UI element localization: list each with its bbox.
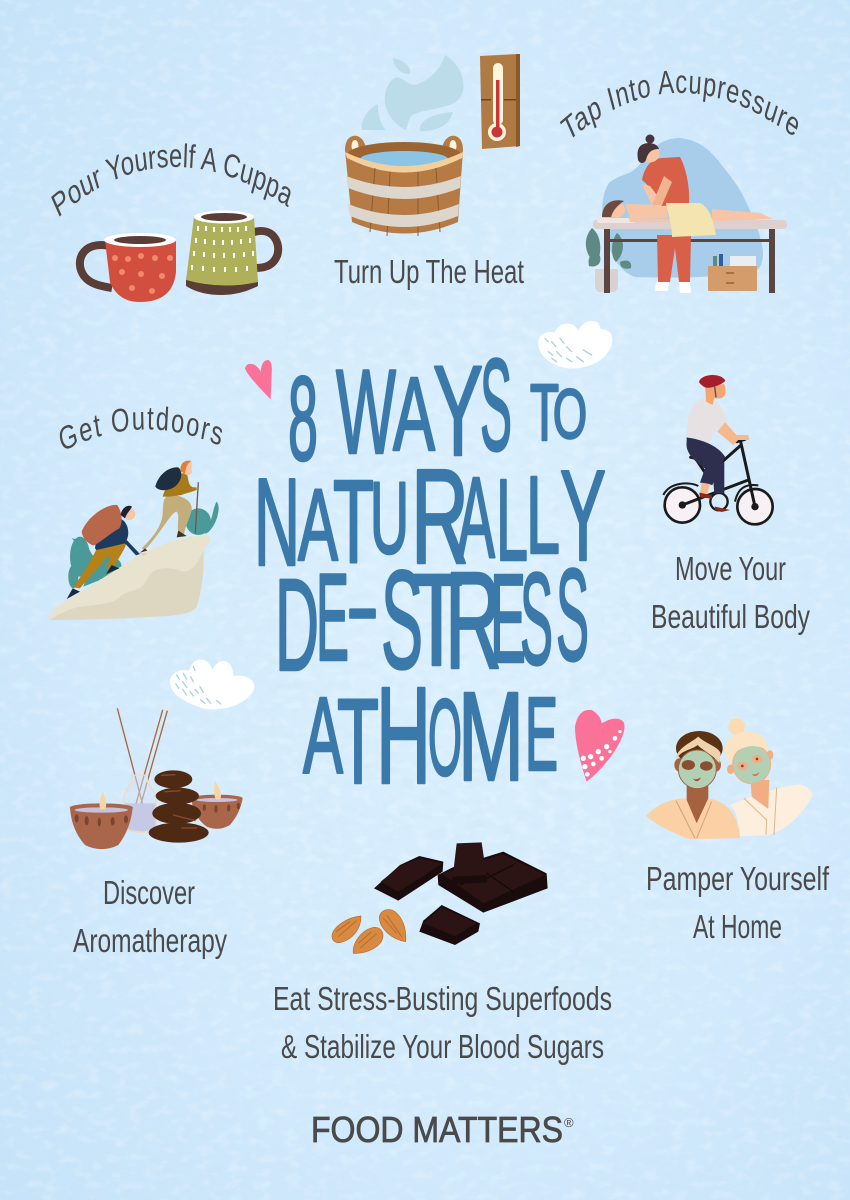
icon: hearts [245, 360, 625, 782]
title: Y [560, 444, 606, 588]
label: Tap Into Acupressure: Tap Into Acupressure [560, 70, 798, 138]
icon: chocolate and almonds [332, 842, 548, 953]
title: - [346, 550, 379, 662]
title [254, 331, 606, 813]
title: H [376, 659, 431, 813]
icon: thermometer [480, 54, 520, 149]
title: T [530, 368, 559, 457]
label: Eat Stress-Busting Superfoods & Stabilize Your Blood Sugars: Eat Stress-Busting Superfoods [273, 980, 612, 1017]
logo: Food Matters: FOOD MATTERS [311, 1109, 563, 1150]
title: W [336, 345, 396, 479]
title: E [490, 548, 526, 689]
label: Discover Aromatherapy: Discover [103, 874, 195, 911]
title: T [337, 673, 379, 809]
label: Pamper Yourself At Home: At Home [693, 908, 782, 945]
label: Eat Stress-Busting Superfoods & Stabilize Your Blood Sugars: & Stabilize Your Blood Sugars [281, 1028, 604, 1065]
label: Move Your Beautiful Body [651, 550, 810, 635]
label: Get Outdoors: Get Outdoors [60, 406, 222, 449]
title: T [333, 456, 374, 588]
label: Turn Up The Heat: Turn Up The Heat [334, 253, 524, 290]
label: Pour Yourself A Cuppa: Pour Yourself A Cuppa [51, 143, 290, 216]
icon: two mugs [80, 210, 278, 302]
icon: two women with face masks [646, 718, 812, 839]
title: T [410, 546, 463, 693]
title: R [411, 441, 469, 592]
title: M [458, 666, 524, 807]
title: Y [433, 340, 483, 483]
title: O [553, 375, 587, 453]
title: L [496, 455, 528, 585]
title: E [316, 549, 349, 687]
title: U [370, 461, 409, 575]
title: L [526, 454, 560, 577]
icon: cloud top right [538, 321, 612, 369]
label: Discover Aromatherapy: Aromatherapy [73, 922, 227, 959]
label: Pamper Yourself At Home [646, 860, 830, 945]
icon: hikers on a rock [48, 461, 219, 620]
icon: steam [362, 55, 464, 131]
logo: Food Matters: ® [564, 1115, 574, 1130]
icon: candles, diffuser and stones [70, 708, 243, 849]
label: Move Your Beautiful Body: Move Your [675, 550, 786, 587]
title: D [275, 551, 319, 698]
icon: cloud left [170, 660, 254, 709]
title: S [381, 541, 423, 698]
title: A [393, 356, 435, 473]
title: O [428, 677, 462, 799]
title: A [298, 468, 338, 582]
icon: massage scene [586, 134, 787, 293]
title: S [480, 331, 512, 478]
title: A [303, 675, 343, 797]
label: Discover Aromatherapy [73, 874, 227, 959]
title: 8 [288, 352, 318, 486]
label: Eat Stress-Busting Superfoods & Stabilize Your Blood Sugars [273, 980, 612, 1065]
title: R [445, 544, 502, 698]
title: N [254, 454, 300, 592]
icon: wooden bucket [345, 136, 463, 236]
title: S [520, 545, 553, 692]
title: A [457, 454, 495, 582]
title: E [525, 676, 558, 793]
icon: cyclist [663, 375, 773, 524]
title: S [556, 541, 589, 688]
